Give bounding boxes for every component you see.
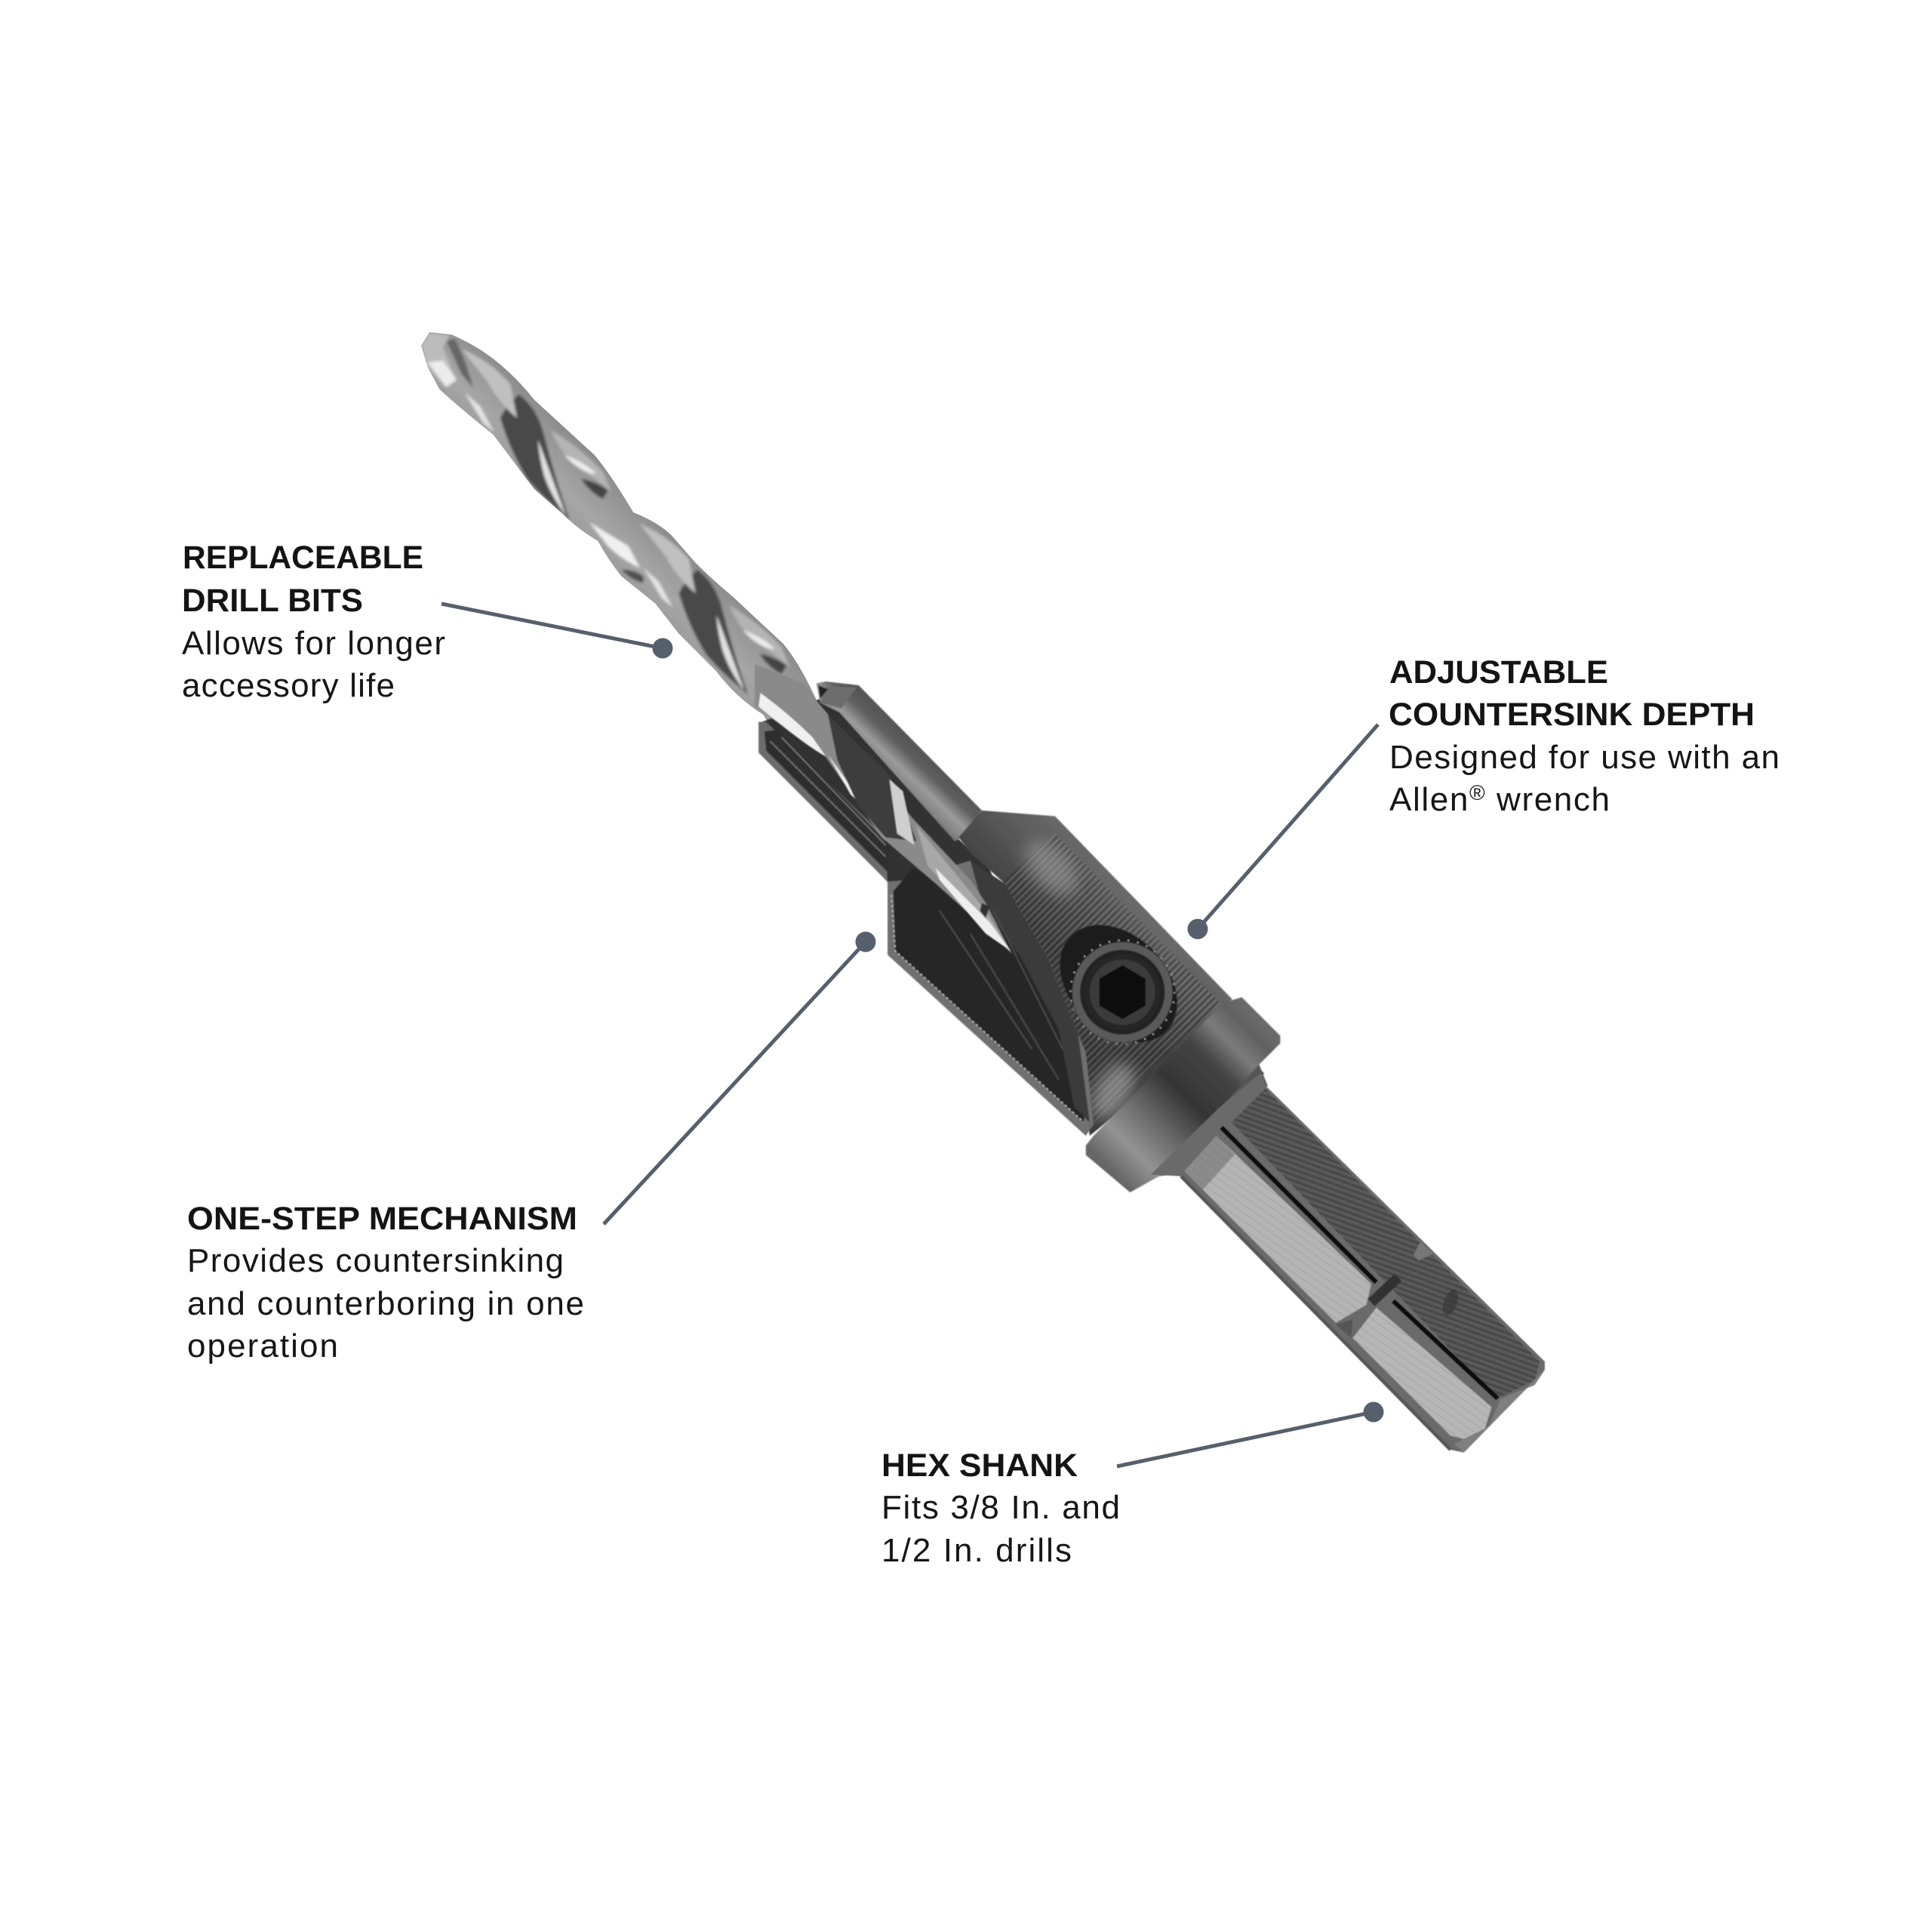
hex shank xyxy=(1151,1072,1545,1453)
label text: DRILL BITS xyxy=(182,583,363,619)
label text: Designed for use with an xyxy=(1389,739,1780,776)
sleeve tube and slot backing xyxy=(762,681,1020,961)
drill bit illustration xyxy=(413,324,1545,1453)
label text xyxy=(1389,654,1780,818)
label text: ONE-STEP MECHANISM xyxy=(187,1201,577,1237)
label text: REPLACEABLE xyxy=(183,540,423,576)
callout: adjustable countersink depth xyxy=(1188,654,1780,939)
countersink slot xyxy=(758,722,890,881)
label text xyxy=(881,1447,1120,1569)
lower flute of bit inside the body xyxy=(755,664,1012,954)
callout: hex shank xyxy=(881,1402,1384,1569)
label text: COUNTERSINK DEPTH xyxy=(1389,697,1755,733)
label text: HEX SHANK xyxy=(881,1447,1078,1484)
label text: wrench xyxy=(1486,781,1610,818)
label text: Allen xyxy=(1389,781,1468,818)
label text: Fits 3/8 In. and xyxy=(881,1489,1120,1526)
leader line and dot xyxy=(604,931,875,1224)
callout: replaceable drill bits xyxy=(182,540,673,704)
leader line and dot xyxy=(1117,1402,1384,1466)
label text: ® xyxy=(1469,781,1485,804)
replaceable twist drill bit xyxy=(421,332,817,721)
label text: and counterboring in one xyxy=(187,1285,584,1322)
label text xyxy=(182,540,445,704)
label text: 1/2 In. drills xyxy=(881,1532,1072,1569)
Allen set screw xyxy=(1037,902,1200,1066)
label text: ADJUSTABLE xyxy=(1389,654,1608,691)
cone body xyxy=(888,811,1232,1136)
collar xyxy=(1086,997,1280,1192)
label text: Provides countersinking xyxy=(187,1242,564,1279)
leader line and dot xyxy=(1188,724,1378,939)
leader line and dot xyxy=(441,604,673,658)
label text: Allows for longer xyxy=(182,625,445,662)
callout: one-step mechanism xyxy=(187,931,875,1364)
label text: accessory life xyxy=(182,667,395,704)
label text xyxy=(187,1201,584,1364)
label text: operation xyxy=(187,1327,338,1364)
